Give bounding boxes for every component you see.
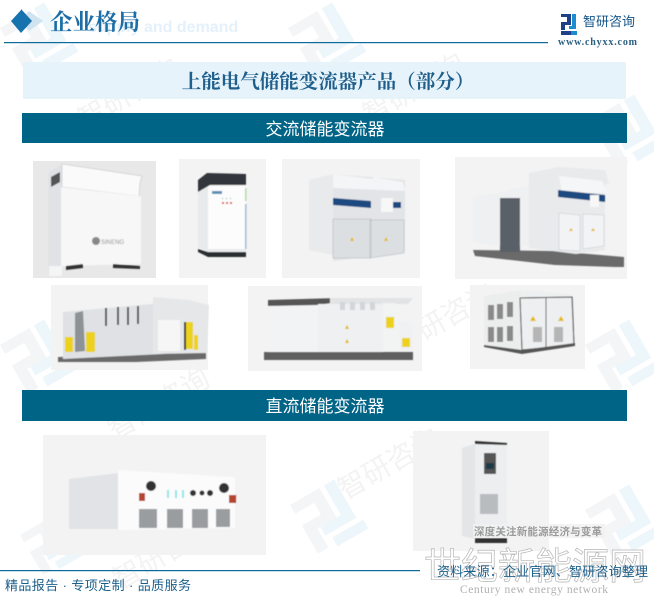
heading: section name: 企业格局 — [50, 10, 140, 35]
product photo 8 — [43, 435, 266, 555]
background watermarks: 智研咨询 — [332, 422, 445, 505]
band: DC storage converter — [22, 390, 627, 421]
product photo 1: SINENG — [101, 240, 124, 246]
band: DC storage converter: 直流储能变流器 — [266, 397, 384, 416]
background watermarks: 智研咨询 — [358, 47, 470, 130]
ghost subtitle: supply and demand — [88, 19, 238, 36]
footer — [0, 564, 648, 593]
product photo 2 — [179, 159, 266, 278]
product photo 3 — [282, 159, 420, 278]
header: section title — [4, 9, 548, 43]
source watermark: 世纪新能源网 — [424, 524, 646, 596]
product photo 1 — [33, 161, 156, 278]
band: AC storage converter — [22, 113, 627, 143]
icon: header diamonds — [11, 9, 43, 33]
band: AC storage converter: 交流储能变流器 — [266, 120, 384, 139]
title band: 上能电气储能变流器产品（部分） — [182, 70, 474, 93]
background watermarks: 智研咨询 — [72, 52, 185, 135]
background watermarks: 智研咨询 — [388, 277, 500, 360]
footer slogan: 精品报告 · 专项定制 · 品质服务 — [5, 578, 191, 593]
background watermarks: 智研咨询 — [108, 512, 220, 595]
logo url: www.chyxx.com — [558, 37, 638, 48]
title band — [23, 62, 626, 99]
background watermarks: 智研咨询 — [102, 362, 215, 445]
logo: 智研咨询 — [558, 14, 638, 48]
product photo 7 — [470, 285, 585, 369]
product photo 6 — [248, 286, 422, 371]
source note: 资料来源：企业官网、智研咨询整理 — [437, 564, 648, 579]
icon: logo mark — [561, 14, 577, 35]
product photo 5 — [51, 285, 209, 370]
watermark tagline: 深度关注新能源经济与变革 — [474, 525, 602, 538]
logo name: 智研咨询 — [583, 14, 635, 29]
product photo 4 — [455, 157, 627, 279]
watermark english: Century new energy network — [460, 584, 608, 596]
watermark large name: 世纪新能源网 — [424, 546, 646, 587]
product photo 9 — [413, 431, 549, 551]
